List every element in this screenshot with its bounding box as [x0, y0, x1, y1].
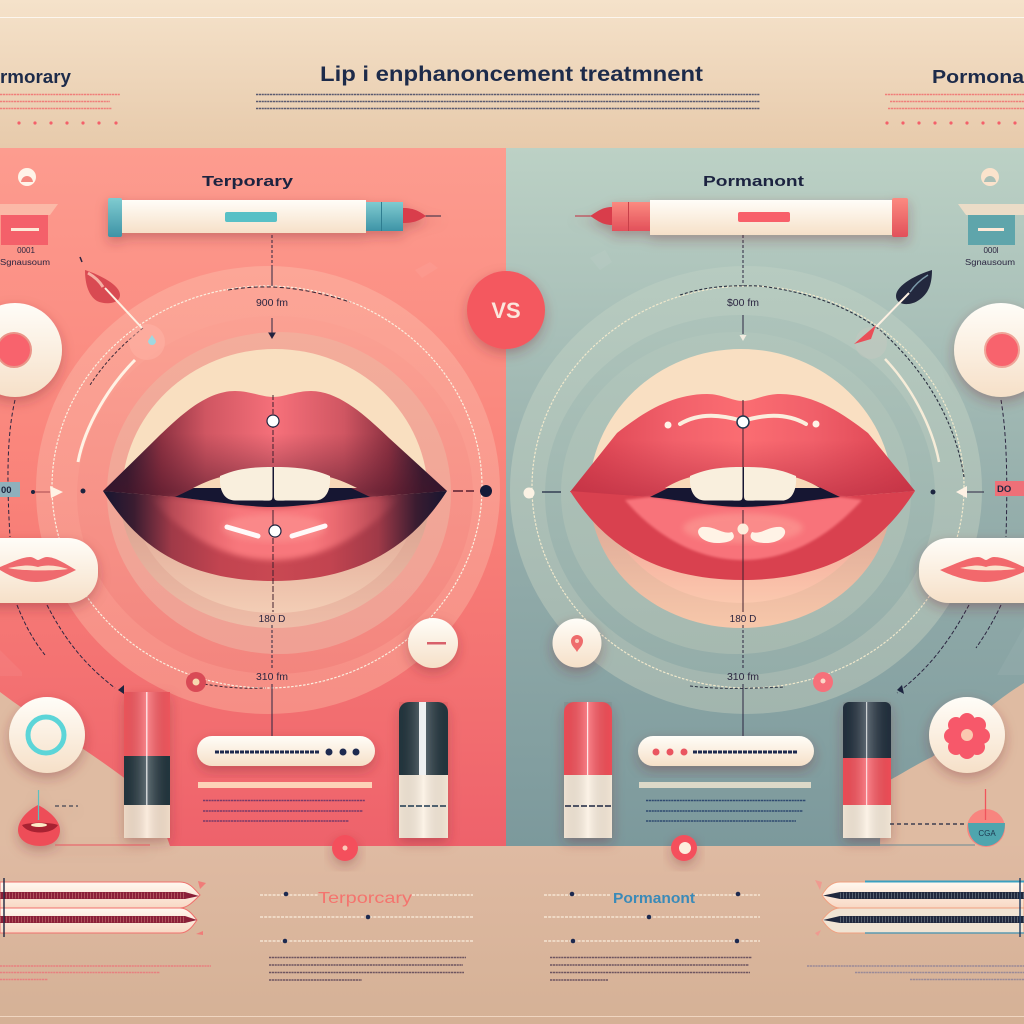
measurement labels: permanent: 310 fm — [727, 671, 759, 683]
pen: permanent — [575, 198, 908, 237]
flower — [944, 713, 990, 759]
measurement labels: temporary: 310 fm — [256, 671, 288, 683]
small bowl icon: right: CGA — [978, 829, 996, 838]
panel: permanent — [506, 148, 1024, 846]
disc icon: left — [0, 303, 62, 397]
measurement labels: permanent — [727, 297, 759, 683]
upper lip — [103, 391, 447, 497]
panel: temporary — [0, 148, 506, 846]
mouth and teeth — [650, 467, 840, 507]
lips: permanent — [570, 394, 915, 612]
measurement labels: permanent: 180 D — [730, 614, 756, 625]
heading: temporary: Terporary — [202, 173, 294, 190]
syringe strips: temporary — [0, 878, 206, 937]
measurement labels: temporary: 180 D — [259, 614, 285, 625]
box icon: left — [0, 204, 58, 267]
lower lip — [103, 491, 447, 581]
rings: permanent — [510, 266, 982, 714]
vs badge: VS — [491, 298, 521, 323]
footer text: far right — [807, 966, 1024, 980]
rings: temporary — [36, 266, 500, 714]
title: Lip i enphanoncement treatmnent — [320, 63, 703, 86]
footer label: temporary: Terporcary — [318, 890, 412, 907]
pin disc — [552, 618, 602, 668]
heading: temporary left edge: rmorary — [0, 67, 71, 87]
box icon: right: Sgnausoum — [965, 258, 1015, 267]
pen: temporary — [108, 198, 441, 237]
horizontal markers: temporary — [0, 482, 492, 498]
disc icon: right — [954, 303, 1024, 397]
syringe strips: permanent — [815, 878, 1024, 937]
icon: crescent right — [981, 168, 999, 186]
lip axis and markers — [267, 395, 281, 612]
label pill: permanent — [638, 736, 814, 766]
footer legend: permanent — [544, 890, 760, 943]
bar and text block: permanent — [639, 782, 811, 821]
header text lines: center — [256, 94, 760, 108]
lip axis and markers — [737, 400, 749, 612]
icon: crescent left — [18, 168, 36, 186]
lip pill: left — [0, 538, 98, 603]
lips: temporary — [103, 391, 447, 612]
box icon: left: Sgnausoum — [0, 258, 50, 267]
ring disc icon — [9, 697, 85, 773]
lower lip — [570, 491, 915, 580]
hatched texture patches — [0, 250, 1024, 676]
lipstick 1: temporary — [124, 692, 170, 838]
horizontal markers: permanent — [524, 481, 1024, 498]
bar and text block: temporary — [198, 782, 372, 821]
footer label: permanent: Pormanont — [613, 890, 695, 907]
footer background — [0, 846, 1024, 1024]
dashed orbit: permanent — [532, 286, 1007, 693]
lipstick 1: permanent — [564, 702, 612, 838]
lipstick 2: permanent — [843, 702, 891, 838]
vs badge — [467, 271, 545, 349]
heading: permanent: Pormanont — [703, 173, 804, 190]
dashed orbit: temporary — [8, 286, 482, 688]
horizontal markers: permanent: DO — [997, 484, 1011, 495]
header background — [0, 0, 1024, 148]
measurement axis: temporary — [269, 235, 275, 737]
lip highlights — [227, 526, 325, 536]
measurement axis: permanent — [740, 235, 746, 737]
lip pill: right — [919, 538, 1024, 603]
drop and needle: left — [80, 257, 165, 360]
measurement labels: permanent: $00 fm — [727, 297, 759, 309]
footer legend: temporary — [260, 890, 473, 943]
leaf and needle: right — [854, 270, 932, 359]
minus disc — [408, 618, 458, 668]
horizontal markers: temporary: 00 — [1, 485, 12, 496]
arrow markers — [118, 685, 904, 694]
heading: permanent right edge: Pormona — [932, 67, 1024, 87]
footer text: center left — [269, 958, 466, 980]
header notes: left — [0, 94, 120, 125]
flower disc icon — [929, 697, 1005, 773]
small bowl icon: right — [880, 789, 1005, 847]
box icon: left: 0001 — [17, 246, 35, 255]
box icon: right: 000l — [983, 246, 999, 255]
lipstick 2: temporary — [399, 702, 448, 838]
footer text: far left — [0, 966, 211, 980]
red node: temporary — [332, 835, 358, 861]
small dot: temporary — [186, 672, 206, 692]
measurement labels: temporary: 900 fm — [256, 297, 288, 309]
beige backdrop behind panels — [0, 148, 1024, 846]
label pill: temporary — [197, 736, 375, 766]
upper lip — [570, 394, 915, 497]
red node: permanent — [671, 835, 697, 861]
box icon: right — [958, 204, 1024, 267]
header notes: right — [885, 94, 1024, 125]
footer text: center right — [550, 958, 752, 980]
small dot: permanent — [813, 672, 833, 692]
measurement labels: temporary — [256, 297, 288, 683]
small lip icon: left — [18, 790, 150, 846]
mouth and teeth — [175, 467, 370, 507]
lip highlights — [664, 416, 820, 543]
